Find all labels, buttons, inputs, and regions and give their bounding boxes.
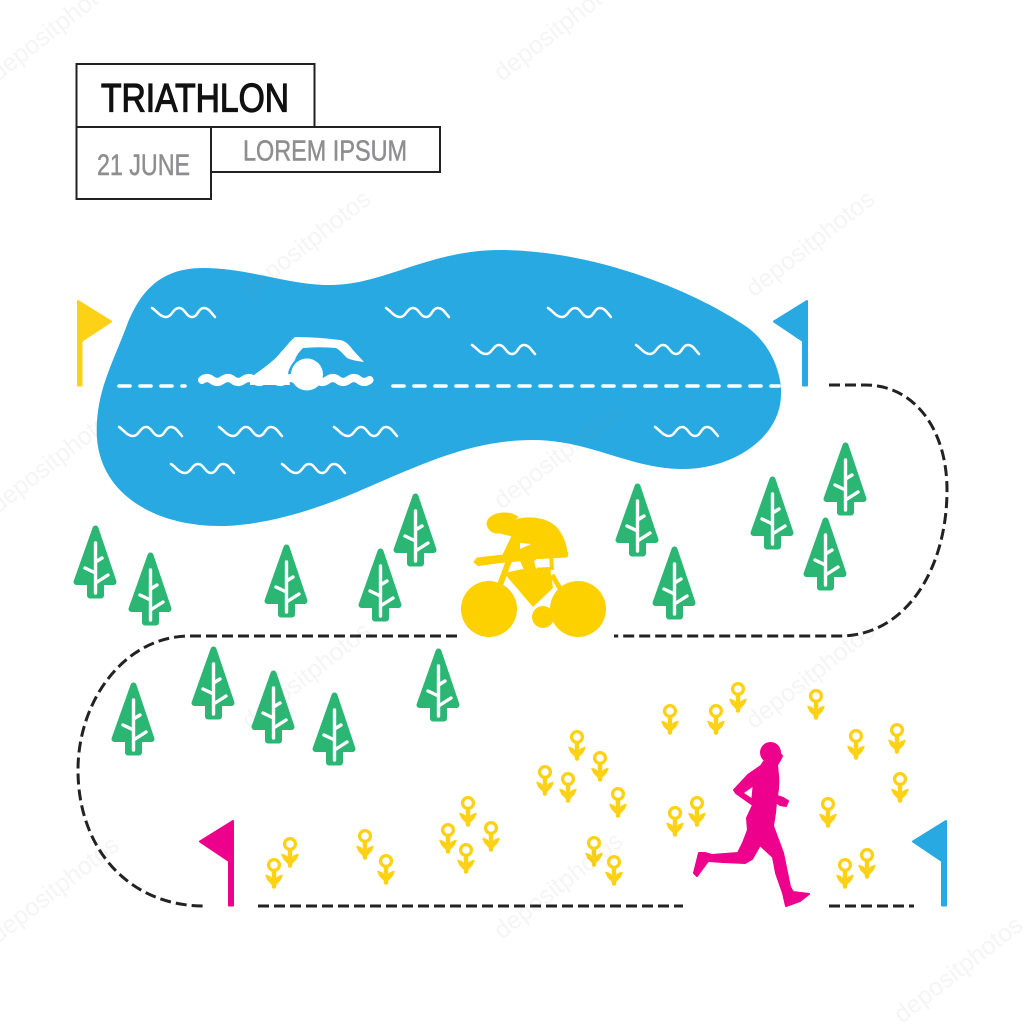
tree — [806, 520, 844, 588]
flower — [483, 823, 499, 850]
flower — [440, 825, 456, 852]
lake — [97, 250, 781, 526]
swim course dashed line — [119, 384, 779, 388]
date box: 21 JUNE — [97, 149, 190, 182]
flower — [569, 732, 585, 758]
flower — [820, 799, 836, 826]
tree — [826, 446, 864, 512]
tree — [268, 548, 304, 614]
flower — [889, 725, 905, 752]
flower — [730, 684, 746, 710]
flower — [662, 706, 678, 732]
flower — [848, 731, 864, 758]
watermarks: depositphotos — [236, 185, 376, 303]
watermarks: depositphotos — [488, 827, 628, 945]
flower — [537, 767, 553, 794]
flower — [667, 808, 683, 834]
flag: finish — [913, 821, 946, 906]
tree — [132, 556, 168, 622]
watermarks: depositphotos — [740, 617, 880, 735]
flower — [592, 753, 608, 780]
flower — [560, 774, 576, 800]
flower — [892, 774, 908, 800]
flag: swim finish — [774, 301, 807, 386]
flower — [606, 857, 622, 884]
tree — [76, 528, 114, 596]
watermarks: depositphotos — [740, 185, 880, 303]
dashed route — [78, 385, 947, 906]
trees — [76, 446, 864, 762]
date box — [76, 127, 211, 199]
flower — [460, 798, 476, 824]
water waves — [119, 308, 718, 473]
tree — [114, 686, 152, 752]
watermarks: depositphotos — [488, 397, 628, 515]
flag: swim start — [78, 301, 111, 386]
flowers — [266, 684, 908, 886]
flower — [859, 850, 875, 876]
title block — [76, 64, 440, 199]
flower — [708, 706, 724, 732]
subtitle box — [211, 127, 440, 172]
flower — [266, 860, 282, 886]
flag: run start — [200, 821, 233, 906]
title box: TRIATHLON — [101, 76, 289, 120]
tree — [362, 552, 398, 618]
flower — [586, 838, 602, 864]
icon: swimmer — [202, 337, 370, 390]
tree — [396, 496, 434, 564]
subtitle box: LOREM IPSUM — [243, 136, 407, 168]
flower — [458, 845, 474, 872]
tree — [420, 652, 456, 718]
flower — [282, 839, 298, 866]
tree — [618, 486, 656, 554]
title box — [76, 64, 314, 127]
flower — [378, 856, 394, 882]
icon: runner — [694, 742, 809, 906]
flower — [689, 798, 705, 824]
tree — [754, 480, 790, 546]
flower — [837, 860, 853, 886]
icon: cyclist — [461, 513, 606, 637]
tree — [194, 650, 232, 716]
flower — [357, 831, 373, 858]
tree — [254, 674, 292, 740]
watermarks: depositphotos — [236, 617, 376, 735]
tree — [656, 550, 692, 616]
flower — [808, 691, 824, 718]
flower — [610, 789, 626, 816]
tree — [316, 696, 352, 762]
